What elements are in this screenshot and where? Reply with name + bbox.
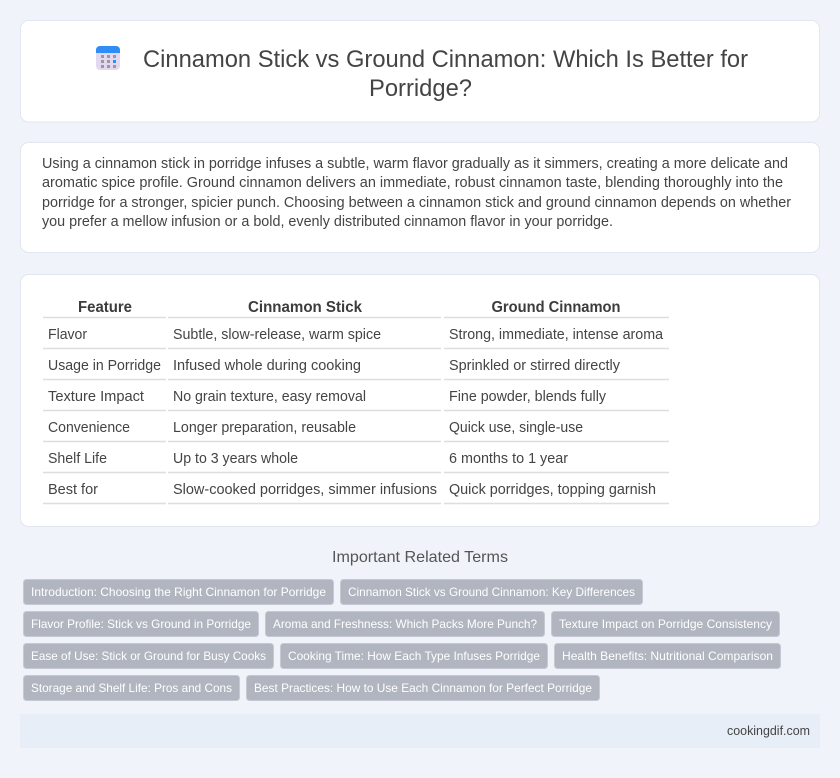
table header: Cinnamon Stick: [248, 299, 362, 316]
footer: [20, 714, 820, 748]
tag: Cinnamon Stick vs Ground Cinnamon: Key Differences: [348, 585, 635, 599]
panel: introduction: [20, 142, 820, 252]
table row: Shelf Life: 6 months to 1 year: [449, 451, 568, 467]
title: Porridge?: [369, 75, 472, 102]
title: [143, 46, 748, 102]
tag: [552, 612, 780, 636]
footer: cookingdif.com: [727, 724, 810, 738]
tag: [554, 644, 780, 668]
tag: [24, 676, 240, 700]
tag: Storage and Shelf Life: Pros and Cons: [31, 681, 232, 695]
table row: Best for: Quick porridges, topping garnish: [449, 482, 656, 498]
table row: Best for: [43, 482, 669, 504]
title: Cinnamon Stick vs Ground Cinnamon: Which Is Better for: [143, 46, 748, 73]
panel: comparison table: [20, 274, 820, 526]
table row: Usage in Porridge: [43, 358, 669, 380]
tag: [24, 644, 274, 668]
table row: Flavor: Subtle, slow-release, warm spice: [173, 327, 381, 343]
table row: Convenience: Quick use, single-use: [449, 420, 583, 436]
tag: Texture Impact on Porridge Consistency: [559, 617, 772, 631]
tag: [266, 612, 544, 636]
tag: [340, 580, 642, 604]
tag: [280, 644, 548, 668]
panel: title header: [20, 20, 820, 122]
table row: Shelf Life: [43, 451, 669, 472]
table row: Convenience: Longer preparation, reusable: [173, 420, 356, 436]
table header: Ground Cinnamon: [492, 299, 620, 316]
table row: Texture Impact: No grain texture, easy removal: [173, 389, 366, 405]
table header: Feature: [78, 299, 132, 316]
tag: Best Practices: How to Use Each Cinnamon for Perfect Porridge: [254, 681, 592, 695]
text block: introduction paragraph: Using a cinnamon stick in porridge infuses a subtle, warm flavor gradually as it simmers, creating a more delicate and: [42, 156, 788, 172]
table row: Best for: Slow-cooked porridges, simmer infusions: [173, 482, 437, 498]
tag: Flavor Profile: Stick vs Ground in Porridge: [31, 617, 251, 631]
tag: Ease of Use: Stick or Ground for Busy Cooks: [31, 649, 266, 663]
text block: introduction paragraph: you prefer a mellow infusion or a bold, evenly distributed cinnamon flavor in your porridge.: [42, 214, 613, 230]
table row: Texture Impact: [43, 389, 669, 410]
tag: Health Benefits: Nutritional Comparison: [562, 649, 773, 663]
table row: Convenience: Convenience: [48, 420, 130, 436]
text block: introduction paragraph: porridge for a stronger, spicier punch. Choosing between a cinnamon stick and ground cinnamon depends on whether: [42, 195, 791, 211]
table row: Convenience: [43, 420, 669, 442]
tag: Cooking Time: How Each Type Infuses Porridge: [288, 649, 540, 663]
related terms tags: [24, 580, 780, 700]
text block: introduction paragraph: [42, 156, 791, 230]
table row: Best for: Best for: [48, 482, 98, 498]
table row: Usage in Porridge: Usage in Porridge: [48, 358, 161, 374]
tag: [24, 580, 334, 604]
table row: Texture Impact: Texture Impact: [48, 389, 144, 405]
tag: [246, 676, 600, 700]
table row: Flavor: [43, 327, 669, 348]
table row: Flavor: Flavor: [48, 327, 87, 343]
tag: [24, 612, 258, 636]
table row: Shelf Life: Up to 3 years whole: [173, 451, 298, 467]
tag: Introduction: Choosing the Right Cinnamon for Porridge: [31, 585, 326, 599]
heading: important related terms: Important Related Terms: [332, 549, 508, 566]
text block: introduction paragraph: aromatic spice profile. Ground cinnamon delivers an immediate, robust cinnamon taste, blending thoroughly into the: [42, 175, 783, 191]
table row: Flavor: Strong, immediate, intense aroma: [449, 327, 663, 343]
table header: [43, 299, 669, 318]
table row: Texture Impact: Fine powder, blends fully: [449, 389, 607, 405]
table row: Usage in Porridge: Sprinkled or stirred directly: [449, 358, 621, 374]
table row: Usage in Porridge: Infused whole during cooking: [173, 358, 361, 374]
table row: Shelf Life: Shelf Life: [48, 451, 107, 467]
tag: Aroma and Freshness: Which Packs More Punch?: [273, 617, 537, 631]
icon: calendar: [96, 46, 120, 70]
